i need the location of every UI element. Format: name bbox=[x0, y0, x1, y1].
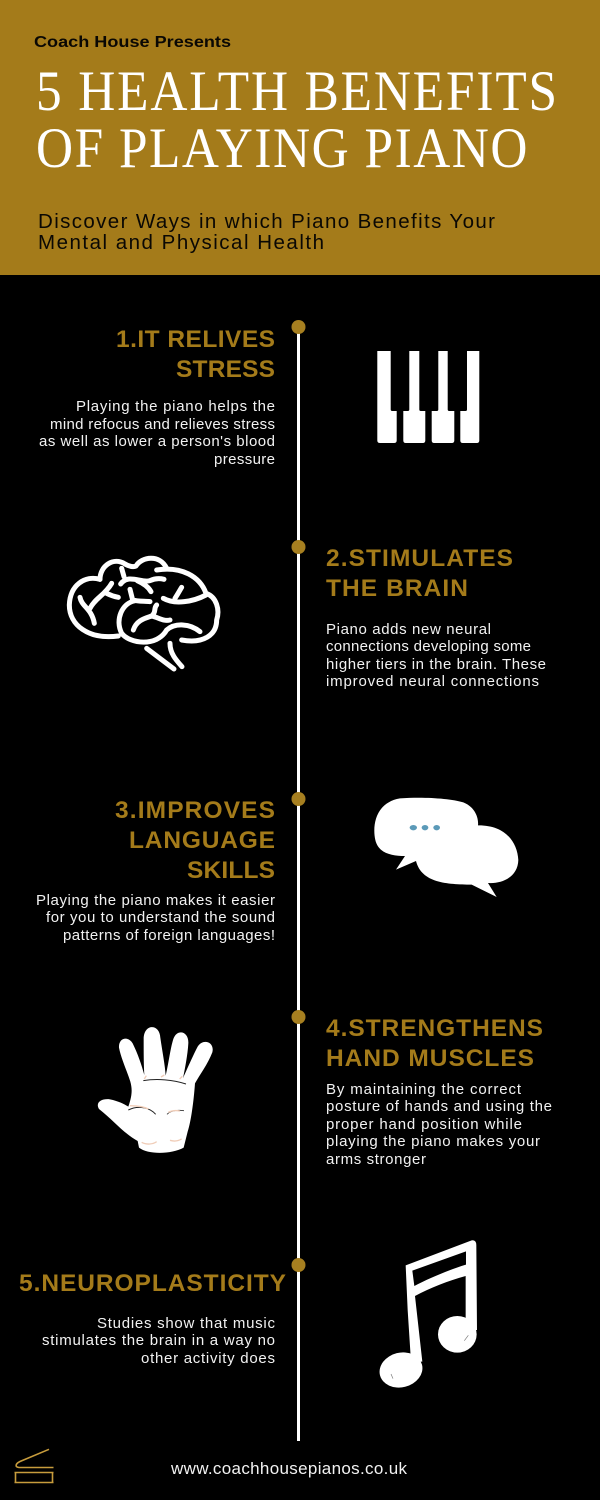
body text 2: connections developing some bbox=[326, 638, 531, 655]
subtitle bbox=[38, 210, 495, 254]
heading 2: 2.STIMULATES bbox=[326, 545, 513, 572]
panel: benefit 5 bbox=[19, 1240, 477, 1392]
heading 4: HAND MUSCLES bbox=[326, 1045, 534, 1072]
body text 4 bbox=[326, 1081, 552, 1168]
body text 1: Playing the piano helps the bbox=[76, 398, 275, 415]
title: 5 HEALTH BENEFITS bbox=[36, 60, 557, 123]
panel: benefit 4 bbox=[98, 1015, 552, 1168]
icon: music notes bbox=[376, 1240, 477, 1392]
heading 1: STRESS bbox=[176, 356, 275, 383]
body text 1: as well as lower a person's blood bbox=[39, 433, 275, 450]
body text 4: proper hand position while bbox=[326, 1116, 522, 1133]
heading 3: LANGUAGE bbox=[129, 827, 275, 854]
body text 4: arms stronger bbox=[326, 1151, 426, 1168]
body text 2: higher tiers in the brain. These bbox=[326, 656, 546, 673]
heading 2 bbox=[326, 545, 513, 602]
footer website: www.coachhousepianos.co.uk bbox=[170, 1459, 408, 1478]
body text 1: mind refocus and relieves stress bbox=[50, 416, 275, 433]
body text 5: other activity does bbox=[141, 1350, 275, 1367]
body text 3 bbox=[36, 892, 275, 944]
heading 2: THE BRAIN bbox=[326, 575, 468, 602]
title bbox=[36, 60, 557, 180]
panel: benefit 3 bbox=[36, 797, 518, 944]
body text 4: posture of hands and using the bbox=[326, 1098, 552, 1115]
header band bbox=[0, 0, 600, 275]
body text 5 bbox=[42, 1315, 276, 1367]
body text 1 bbox=[39, 398, 275, 468]
body text 3: Playing the piano makes it easier bbox=[36, 892, 275, 909]
body text 4: playing the piano makes your bbox=[326, 1133, 540, 1150]
heading 1: 1.IT RELIVES bbox=[116, 326, 275, 353]
panel: benefit 1 bbox=[39, 326, 479, 468]
body text 3: patterns of foreign languages! bbox=[63, 927, 275, 944]
body text 5: stimulates the brain in a way no bbox=[42, 1332, 275, 1349]
body text 5: Studies show that music bbox=[97, 1315, 276, 1332]
body text 2: improved neural connections bbox=[326, 673, 539, 690]
icon: hand bbox=[98, 1027, 213, 1153]
heading 5: 5.NEUROPLASTICITY bbox=[19, 1270, 286, 1297]
heading 4 bbox=[326, 1015, 543, 1072]
body text 2 bbox=[326, 621, 546, 690]
heading 3: SKILLS bbox=[187, 857, 275, 884]
heading 3 bbox=[115, 797, 275, 884]
heading 4: 4.STRENGTHENS bbox=[326, 1015, 543, 1042]
heading 3: 3.IMPROVES bbox=[115, 797, 275, 824]
icon: piano keys bbox=[377, 351, 479, 443]
body text 3: for you to understand the sound bbox=[46, 909, 275, 926]
body text 2: Piano adds new neural bbox=[326, 621, 491, 638]
presenter line: Coach House Presents bbox=[34, 34, 231, 51]
panel: benefit 2 bbox=[69, 545, 546, 690]
body text 1: pressure bbox=[214, 451, 275, 468]
subtitle: Discover Ways in which Piano Benefits Your bbox=[38, 210, 495, 233]
heading 1 bbox=[116, 326, 275, 383]
subtitle: Mental and Physical Health bbox=[38, 231, 324, 254]
title: OF PLAYING PIANO bbox=[36, 117, 527, 180]
timeline bbox=[292, 320, 306, 1441]
body text 4: By maintaining the correct bbox=[326, 1081, 522, 1098]
icon: brain bbox=[69, 558, 218, 669]
footer logo: grand piano bbox=[14, 1449, 54, 1482]
icon: speech bubbles bbox=[374, 798, 518, 897]
